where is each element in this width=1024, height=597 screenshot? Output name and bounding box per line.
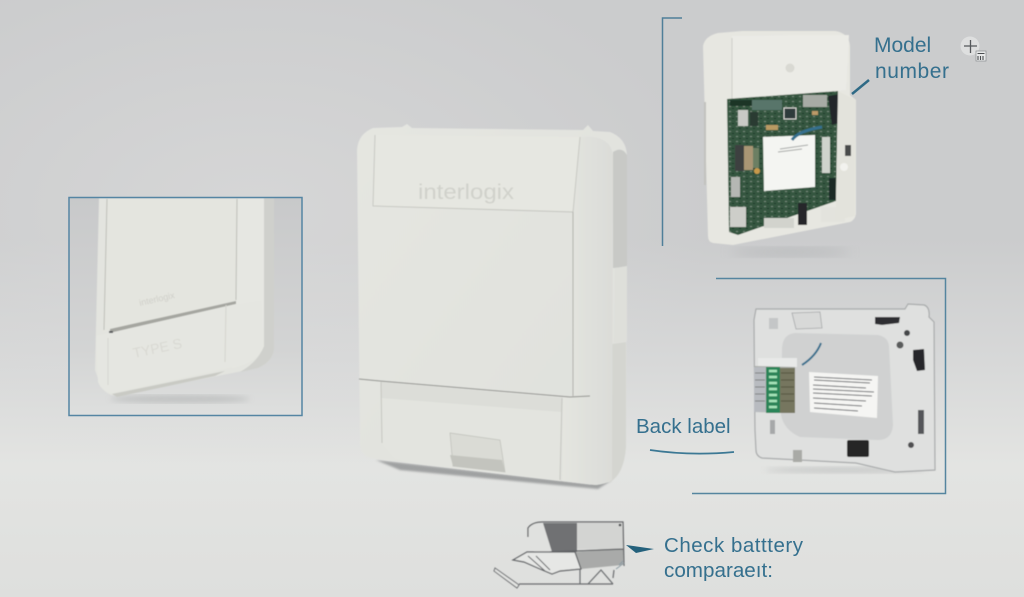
label: back label [636, 415, 734, 454]
diagram: battery compartment [494, 522, 624, 588]
device corner body [95, 198, 274, 397]
underline [650, 450, 734, 454]
label: check battery compartment: Check batttery [664, 534, 804, 557]
bracket: model number [662, 18, 682, 246]
centre panel edge [572, 212, 574, 396]
embossed logo: interlogix [418, 181, 515, 204]
main device [357, 124, 627, 489]
faint embossed marks: TYPE S [131, 335, 183, 361]
top recess [792, 312, 822, 329]
ground shadow [376, 460, 612, 489]
bracket: back label [692, 278, 946, 494]
device body [357, 124, 627, 485]
leader line [852, 80, 869, 94]
terminal block [754, 366, 795, 413]
zoom panel: device bottom corner [69, 197, 302, 416]
shell [703, 31, 856, 245]
faint embossed logo: interlogix [138, 290, 176, 308]
white board label [763, 135, 815, 191]
label: model number: Model [874, 34, 931, 57]
label: model number: number [875, 60, 949, 83]
shadow under the corner [110, 395, 250, 403]
label: check battery compartment [664, 534, 804, 582]
top panel [373, 135, 580, 212]
right compartment [836, 91, 856, 220]
pointer on plate [802, 343, 821, 365]
plate [754, 304, 935, 472]
icon: zoom cursor with calculator [960, 36, 986, 61]
battery door [380, 382, 562, 481]
right side wall [613, 150, 627, 268]
label: back label: Back label [636, 415, 731, 438]
teal pointer on board [792, 127, 822, 140]
label: model number [852, 34, 949, 94]
back plate of device [754, 304, 935, 473]
raised cover [781, 333, 893, 440]
arrow: battery pointer [626, 545, 654, 553]
rating label [809, 372, 878, 418]
open device with circuit board [703, 31, 856, 257]
dark cut-outs [875, 317, 900, 325]
circuit board [727, 91, 845, 235]
door latch [450, 433, 505, 472]
label: check battery compartment: comparaeıt: [664, 559, 773, 582]
